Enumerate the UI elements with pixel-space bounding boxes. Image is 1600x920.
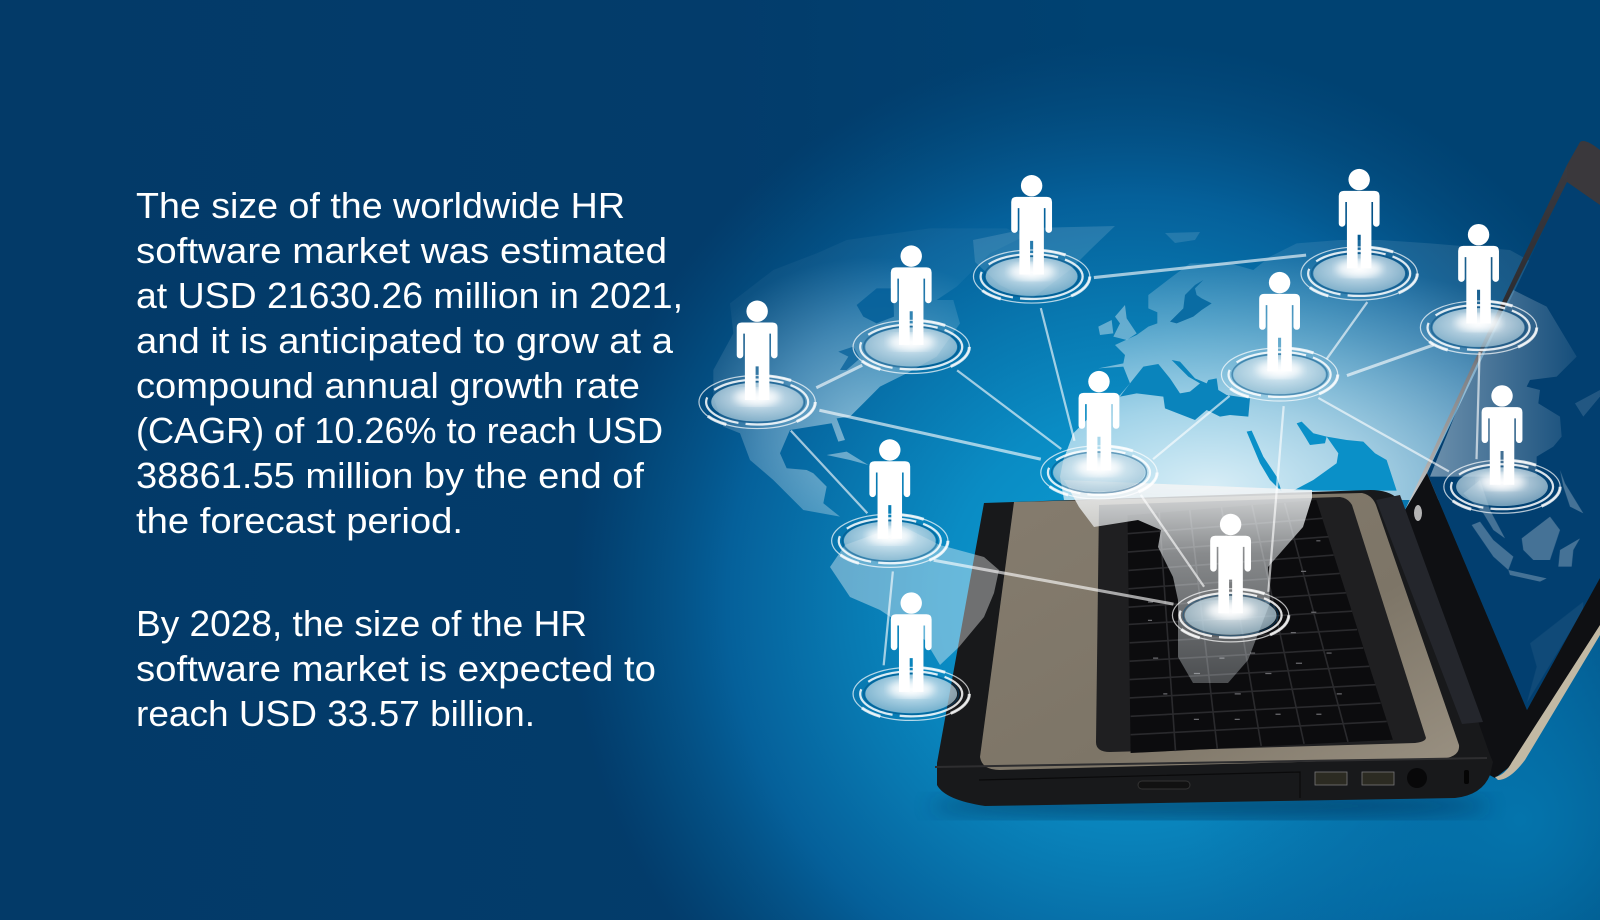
screen map: South East Asia bbox=[1463, 470, 1583, 703]
person node: Middle East bbox=[1221, 272, 1338, 401]
text block: 2028 forecast: software market is expected to bbox=[136, 648, 656, 689]
person node: Russia bbox=[1301, 169, 1417, 300]
keyboard bbox=[1128, 500, 1393, 753]
text block: market size: The size of the worldwide HR bbox=[136, 185, 625, 226]
laptop screen bbox=[1427, 182, 1600, 710]
lid frame bbox=[1402, 141, 1600, 780]
person node: South Africa on keyboard bbox=[1172, 514, 1289, 642]
world map: Africa over laptop bbox=[1064, 480, 1312, 683]
text block: market size: at USD 21630.26 million in 2021, bbox=[136, 275, 683, 316]
network connection lines bbox=[791, 255, 1480, 665]
screen map: China bbox=[1430, 290, 1600, 477]
world map: North America bbox=[713, 228, 1023, 517]
hinge band bbox=[1376, 495, 1483, 724]
person node: North America bbox=[853, 245, 969, 373]
person node: Central America bbox=[832, 439, 948, 567]
illustration: laptop with world network bbox=[699, 141, 1600, 818]
text block: 2028 forecast bbox=[136, 603, 656, 734]
person node: West Africa bbox=[1041, 371, 1157, 499]
text block: market size: and it is anticipated to grow at a bbox=[136, 320, 674, 361]
text block: 2028 forecast: By 2028, the size of the HR bbox=[136, 603, 587, 644]
front edge and ports bbox=[935, 758, 1487, 798]
text block: market size: the forecast period. bbox=[136, 500, 463, 541]
world map: Greenland and Iceland bbox=[973, 226, 1200, 300]
laptop bbox=[930, 141, 1600, 818]
text block: market size: compound annual growth rate bbox=[136, 365, 640, 406]
person node: far west bbox=[699, 301, 815, 429]
text block: market size: 38861.55 million by the end of bbox=[136, 455, 645, 496]
text block: market size bbox=[136, 185, 683, 541]
text block: market size: software market was estimated bbox=[136, 230, 667, 271]
world map: Europe, Asia and Africa bbox=[1060, 240, 1600, 500]
person node: East Asia bbox=[1420, 224, 1537, 354]
palm rest bbox=[980, 493, 1459, 770]
person node: Greenland bbox=[973, 175, 1090, 303]
laptop shadow bbox=[930, 794, 1490, 818]
text block: 2028 forecast: reach USD 33.57 billion. bbox=[136, 693, 535, 734]
text block: market size: (CAGR) of 10.26% to reach USD bbox=[136, 410, 663, 451]
world map: South America bbox=[830, 525, 999, 665]
keyboard deck bbox=[1096, 497, 1426, 752]
person node: South East Asia bbox=[1444, 385, 1560, 513]
person node: South America bbox=[853, 592, 969, 720]
laptop base bbox=[937, 490, 1493, 806]
